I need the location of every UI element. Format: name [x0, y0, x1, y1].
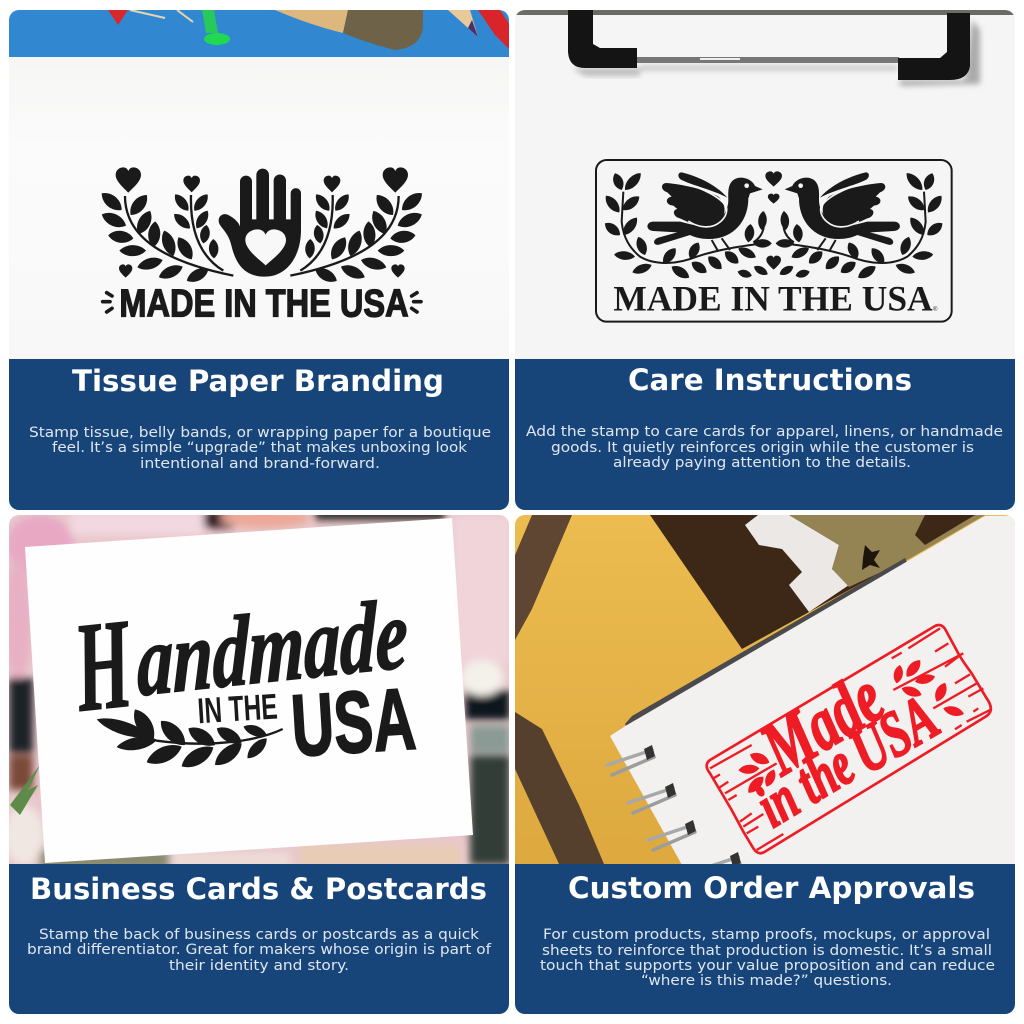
script wording: andmade: andmade — [137, 578, 408, 717]
script wording: USA: USA — [838, 681, 951, 788]
caption band — [9, 359, 509, 511]
description — [27, 927, 492, 974]
description: feel. It’s a simple “upgrade” that makes unboxing look — [52, 440, 468, 456]
stamp: made in the USA hand and hearts — [98, 167, 426, 326]
caption band — [515, 864, 1015, 1015]
photo: paper on blue desk — [9, 10, 509, 86]
description: Add the stamp to care cards for apparel, linens, or handmade — [526, 424, 1003, 440]
photo: clipboard — [515, 10, 1015, 360]
description: “where is this made?” questions. — [641, 973, 892, 989]
heading: Tissue Paper Branding — [72, 364, 444, 398]
description — [540, 927, 995, 989]
heading: Business Cards & Postcards — [30, 872, 487, 906]
caption band — [9, 864, 509, 1015]
stamp border — [596, 160, 952, 322]
large wording: USA — [289, 670, 418, 775]
left sprig — [98, 167, 233, 312]
caption band — [515, 359, 1015, 511]
description: goods. It quietly reinforces origin while the customer is — [551, 440, 974, 456]
description: intentional and brand-forward. — [140, 456, 380, 472]
description: Stamp the back of business cards or postcards as a quick — [39, 927, 480, 943]
center hearts — [765, 171, 782, 270]
notebook spirals — [605, 745, 742, 864]
description: brand differentiator. Great for makers whose origin is part of — [27, 942, 492, 958]
panel: care instructions — [515, 10, 1015, 511]
small wording: IN THE — [196, 686, 279, 731]
description: sheets to reinforce that production is domestic. It’s a small — [542, 943, 992, 959]
script wording: capital H: H — [68, 592, 140, 739]
panel: custom order approvals — [515, 515, 1015, 1015]
description: already paying attention to the details. — [613, 455, 911, 471]
description — [526, 424, 1003, 471]
stamp: made in the USA birds — [596, 160, 952, 322]
panel: business cards and postcards — [4, 508, 512, 1015]
photo: notebook on yellow — [515, 515, 1015, 865]
plank outline — [707, 625, 991, 853]
laurel sprig — [96, 709, 284, 768]
description: For custom products, stamp proofs, mockups, or approval — [543, 927, 990, 943]
stamp wording: MADE IN THE USA — [119, 282, 409, 326]
photo: card on flowers — [4, 508, 512, 870]
description: touch that supports your value proposition and can reduce — [540, 958, 995, 974]
description: their identity and story. — [169, 958, 349, 974]
stamp: made in the USA plank — [707, 625, 991, 853]
script wording: Made: Made — [747, 656, 898, 792]
panel: tissue paper branding — [9, 10, 510, 511]
description — [30, 426, 490, 468]
right sprig — [290, 167, 426, 312]
registered mark: ® — [933, 306, 938, 313]
left bird and branch — [602, 170, 772, 282]
stamp wording: MADE IN THE USA — [613, 279, 933, 319]
stamp: handmade in the USA — [78, 600, 416, 768]
script wording: in the: in the — [745, 731, 866, 840]
leaves — [738, 657, 965, 796]
heading: Care Instructions — [628, 363, 912, 397]
right bird and branch — [776, 170, 945, 282]
icon: hand with heart — [219, 169, 301, 277]
description: Stamp tissue, belly bands, or wrapping paper for a boutique — [29, 425, 491, 441]
heading: Custom Order Approvals — [568, 871, 975, 905]
